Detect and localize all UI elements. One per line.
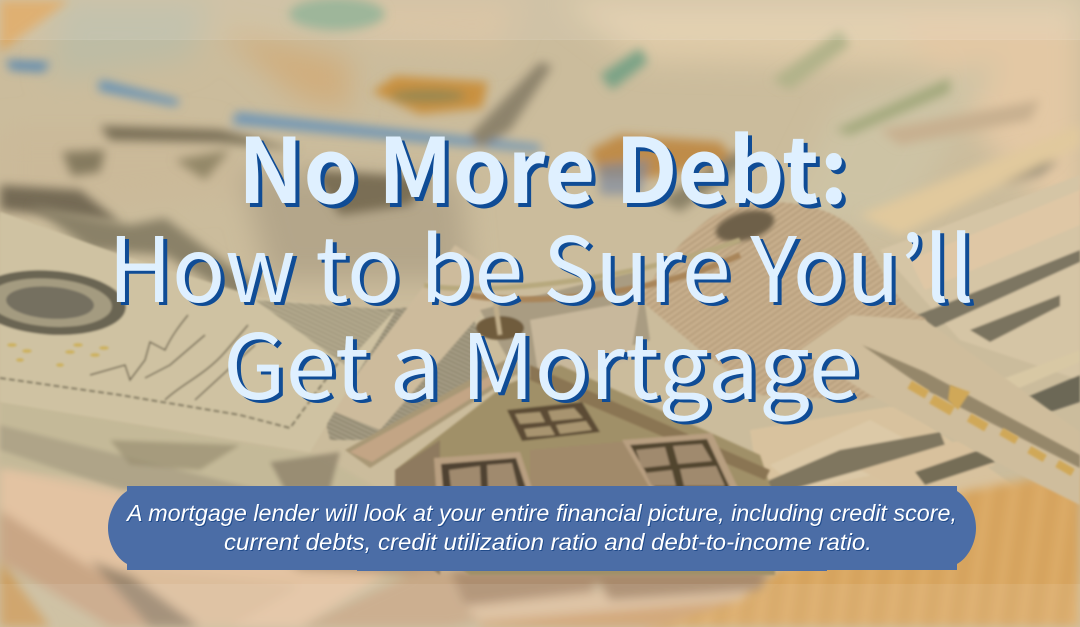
- banner shape: [108, 486, 976, 571]
- banner text: [125, 500, 957, 555]
- upper soft areas: [0, 0, 1080, 280]
- banner text shadow: [126, 501, 958, 556]
- key head: [640, 202, 930, 400]
- title shadow: How to be Sure You’ll: [112, 201, 978, 331]
- title text: How to be Sure You’ll: [108, 198, 974, 328]
- icon: model house: [345, 360, 775, 575]
- icon: key: [640, 202, 1080, 505]
- title text: No More Debt:: [238, 99, 848, 229]
- title shadow: Get a Mortgage: [227, 298, 863, 428]
- engraved portrait corner on bill: [255, 300, 395, 365]
- serial dots on bill: [7, 343, 109, 367]
- window upper: [507, 402, 600, 441]
- key teeth: [907, 381, 1075, 476]
- banner text shadow: A mortgage lender will look at your entire financial picture, including credit score,: [126, 501, 958, 527]
- key hole: [712, 205, 778, 247]
- wooden table, bottom right: [640, 470, 1080, 627]
- bottom strip overlay: [0, 584, 1080, 627]
- top strip overlay: [0, 0, 1080, 39]
- window left: [434, 452, 532, 488]
- banner text: A mortgage lender will look at your entire financial picture, including credit score,: [125, 500, 957, 526]
- seal on bill: [0, 265, 128, 340]
- title text: Get a Mortgage: [223, 295, 859, 425]
- top-left orange corner: [0, 0, 70, 52]
- key shaft: [800, 315, 1080, 505]
- dashed border line on bill: [0, 360, 340, 428]
- bill stack under left bill: [0, 400, 380, 490]
- key ring: [424, 240, 740, 335]
- centre bill engraving and light strip: [300, 245, 650, 440]
- title shadow: [112, 103, 978, 428]
- banner text shadow: current debts, credit utilization ratio and debt-to-income ratio.: [225, 530, 873, 556]
- title text: [108, 99, 974, 425]
- window right: [622, 433, 738, 488]
- lower blurred bills fan: [0, 468, 775, 627]
- title shadow: No More Debt:: [242, 103, 852, 233]
- left bill with Federal Reserve seal: [0, 212, 395, 452]
- right-hand bills: [750, 175, 1080, 510]
- wall section: [530, 440, 650, 490]
- signature on bill: [90, 315, 255, 400]
- portrait shadow behind left bill: [30, 205, 260, 300]
- banner text: current debts, credit utilization ratio and debt-to-income ratio.: [224, 529, 872, 555]
- blurred details on upper bills: [0, 0, 1080, 235]
